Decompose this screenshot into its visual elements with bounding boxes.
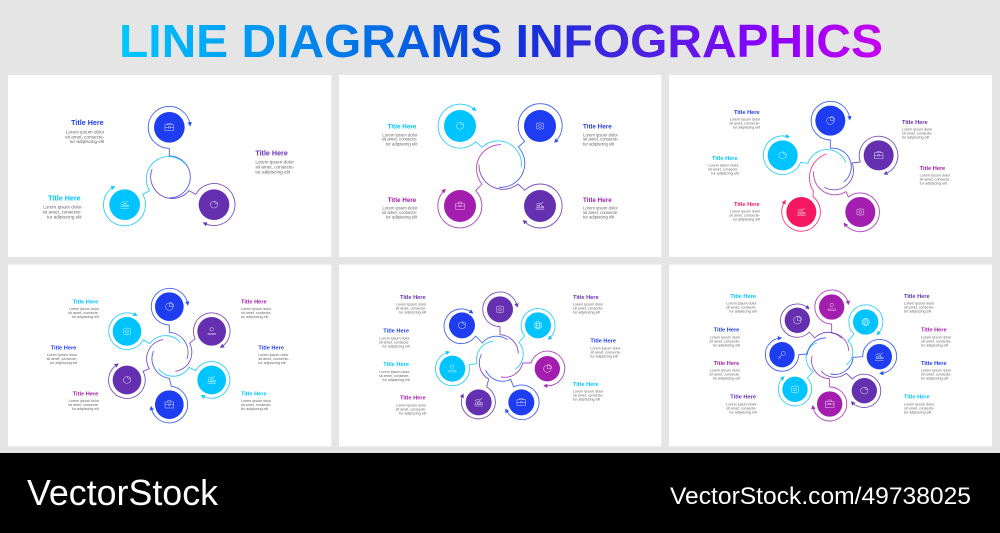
text: magenta lower left: Title Here — [400, 396, 426, 402]
panel 6: eight-step diagram — [669, 265, 992, 446]
text: purple lower left — [726, 395, 757, 414]
step: magenta right — [501, 351, 565, 386]
text: magenta lower left — [68, 391, 100, 411]
text: blue left: tur adipiscing elit — [382, 344, 410, 348]
text: blue: tur adipiscing elit — [70, 139, 105, 144]
text: cyan lower right: Lorem ipsum dolor — [904, 402, 935, 406]
text: cyan — [43, 194, 82, 219]
text: pink: Lorem ipsum dolor — [730, 210, 761, 214]
text: blue right: tur adipiscing elit — [590, 354, 618, 358]
step: magenta — [438, 145, 501, 228]
text: blue: Lorem ipsum dolor — [583, 132, 619, 137]
step: purple — [825, 136, 898, 190]
text: magenta left — [709, 361, 741, 381]
text: cyan upper left: Lorem ipsum dolor — [726, 302, 757, 306]
step: purple upper right — [176, 313, 230, 371]
text: blue: Lorem ipsum dolor — [66, 129, 105, 134]
text: pink: Title Here — [734, 202, 760, 208]
text: magenta: Lorem ipsum dolor — [382, 206, 418, 211]
step: cyan lower right — [159, 362, 230, 398]
text: magenta: tur adipiscing elit — [920, 182, 947, 186]
step: blue lower right — [486, 370, 539, 420]
text: magenta upper right: sit amet, consecte- — [241, 311, 272, 315]
panel 1: three-step diagram — [8, 75, 331, 257]
text: blue right: sit amet, consecte- — [258, 357, 290, 361]
text: blue left: Title Here — [383, 329, 409, 335]
text: cyan right — [573, 382, 604, 402]
text: magenta upper right: Title Here — [241, 300, 267, 306]
text: blue right: Lorem ipsum dolor — [258, 353, 289, 357]
text: magenta left: tur adipiscing elit — [713, 377, 740, 381]
text: purple upper right: Title Here — [573, 295, 599, 301]
step: cyan lower left — [778, 343, 816, 406]
text: blue: Title Here — [71, 119, 104, 127]
text: blue left: Lorem ipsum dolor — [710, 335, 741, 339]
step: pink — [782, 154, 826, 231]
text: blue right: tur adipiscing elit — [258, 361, 286, 365]
text: blue: Lorem ipsum dolor — [730, 118, 761, 122]
text: blue: Title Here — [734, 110, 760, 116]
text: magenta upper right — [241, 300, 272, 319]
text: cyan upper left: sit amet, consecte- — [726, 306, 757, 310]
text: pink — [729, 202, 761, 222]
step: purple lower right — [821, 371, 881, 407]
text: cyan lower right: sit amet, consecte- — [241, 403, 272, 407]
step: cyan — [438, 104, 521, 167]
step: magenta — [814, 172, 879, 232]
text: blue right: sit amet, consecte- — [921, 373, 952, 377]
text: pink: sit amet, consecte- — [729, 214, 761, 218]
panel 3: five-step diagram — [669, 75, 992, 257]
text: cyan upper left — [68, 300, 100, 319]
footer brand: VectorStock — [27, 472, 219, 513]
panel 4 background — [8, 265, 331, 446]
title: LINE DIAGRAMS INFOGRAPHICS — [119, 15, 883, 67]
text: blue left: sit amet, consecte- — [47, 357, 78, 361]
text: magenta: tur adipiscing elit — [386, 214, 418, 219]
text: magenta: Lorem ipsum dolor — [920, 174, 951, 178]
text: cyan: tur adipiscing elit — [47, 214, 82, 219]
step: cyan left — [435, 341, 493, 386]
text: magenta left: Lorem ipsum dolor — [710, 369, 741, 373]
text: cyan — [708, 156, 739, 176]
text: blue: tur adipiscing elit — [583, 141, 615, 146]
text: cyan: Title Here — [388, 124, 417, 131]
text: cyan lower right: Title Here — [241, 391, 267, 397]
text: cyan lower right: Lorem ipsum dolor — [241, 399, 272, 403]
text: cyan left: Lorem ipsum dolor — [379, 370, 410, 374]
text: blue left: sit amet, consecte- — [709, 339, 741, 343]
step: cyan — [103, 157, 185, 226]
text: magenta right: sit amet, consecte- — [921, 339, 952, 343]
text: purple upper right: tur adipiscing elit — [573, 311, 600, 315]
text: blue right: sit amet, consecte- — [590, 350, 622, 354]
text: magenta lower left: tur adipiscing elit — [399, 411, 426, 415]
text: purple lower left: sit amet, consecte- — [726, 406, 757, 410]
text: blue right: Title Here — [590, 339, 616, 345]
step: blue right — [831, 339, 897, 374]
text: blue left: tur adipiscing elit — [713, 343, 740, 347]
text: blue right — [590, 339, 622, 358]
text: cyan: Lorem ipsum dolor — [382, 132, 418, 137]
text: purple upper left: tur adipiscing elit — [399, 311, 426, 315]
text: magenta right — [921, 328, 952, 347]
text: cyan: tur adipiscing elit — [711, 172, 739, 176]
text: cyan upper left: tur adipiscing elit — [72, 315, 99, 319]
text: cyan upper left: Lorem ipsum dolor — [69, 307, 100, 311]
text: purple — [255, 149, 295, 175]
footer url: VectorStock.com/49738025 — [670, 483, 971, 510]
text: cyan left: sit amet, consecte- — [379, 374, 410, 378]
text: purple upper left — [396, 295, 427, 315]
text: blue: Title Here — [583, 124, 612, 131]
step: cyan — [763, 136, 846, 175]
text: blue: sit amet, consecte- — [583, 137, 619, 142]
text: purple: tur adipiscing elit — [902, 136, 929, 140]
text: magenta upper right: Lorem ipsum dolor — [241, 307, 272, 311]
text: purple lower left: Lorem ipsum dolor — [726, 402, 757, 406]
text: cyan — [382, 124, 418, 146]
text: magenta: Title Here — [388, 197, 417, 204]
panel 2: four-step diagram — [339, 75, 661, 257]
text: purple: sit amet, consecte- — [902, 132, 933, 136]
text: purple lower left: tur adipiscing elit — [729, 410, 757, 414]
text: magenta lower left: Lorem ipsum dolor — [396, 403, 427, 407]
text: cyan: tur adipiscing elit — [386, 141, 418, 146]
text: magenta right: Title Here — [921, 328, 947, 334]
text: blue left: Title Here — [714, 328, 739, 334]
step: blue upper left — [444, 309, 507, 344]
text: blue right: Lorem ipsum dolor — [921, 369, 952, 373]
step: blue left — [765, 338, 826, 371]
text: purple upper right: sit amet, consecte- — [904, 306, 935, 310]
text: blue right — [921, 361, 952, 381]
text: magenta lower left: Lorem ipsum dolor — [69, 399, 100, 403]
text: cyan right: sit amet, consecte- — [573, 394, 604, 398]
step: blue bottom — [151, 351, 188, 423]
text: cyan upper left: Title Here — [730, 294, 756, 300]
text: blue: tur adipiscing elit — [733, 126, 760, 130]
text: magenta right: tur adipiscing elit — [921, 343, 948, 347]
text: purple: Lorem ipsum dolor — [255, 160, 294, 165]
step: purple lower left — [109, 340, 163, 398]
text: cyan lower right: tur adipiscing elit — [904, 410, 931, 414]
text: blue left: tur adipiscing elit — [50, 361, 77, 365]
text: magenta left: sit amet, consecte- — [709, 373, 741, 377]
text: cyan left: Title Here — [383, 362, 409, 368]
text: magenta — [920, 166, 951, 186]
text: magenta: sit amet, consecte- — [382, 210, 418, 215]
panel 3 background — [669, 75, 992, 257]
text: blue — [65, 119, 105, 144]
text: blue right: Title Here — [921, 361, 947, 367]
text: blue: sit amet, consecte- — [65, 134, 105, 139]
text: purple upper left: Title Here — [400, 295, 426, 301]
step: blue — [148, 106, 190, 198]
text: blue left — [709, 328, 741, 347]
step: blue — [811, 101, 851, 182]
panel 4: six-step diagram — [8, 265, 331, 446]
step: blue — [499, 104, 562, 187]
text: cyan right: Title Here — [573, 382, 599, 388]
text: purple upper right: Lorem ipsum dolor — [904, 302, 935, 306]
step: magenta bottom — [812, 356, 847, 421]
text: purple: Title Here — [255, 149, 288, 157]
step: cyan upper left — [109, 313, 180, 350]
panel 1 background — [8, 75, 331, 257]
text: blue right — [258, 346, 290, 365]
text: magenta lower left — [396, 396, 427, 415]
text: cyan lower right: Title Here — [904, 395, 930, 401]
text: purple upper right: Title Here — [904, 294, 930, 300]
text: purple upper left: Lorem ipsum dolor — [396, 303, 427, 307]
text: blue left: Title Here — [51, 346, 76, 352]
text: cyan upper left — [726, 294, 757, 314]
text: magenta lower left: tur adipiscing elit — [72, 407, 99, 411]
text: cyan upper left: tur adipiscing elit — [729, 310, 757, 314]
text: cyan: sit amet, consecte- — [382, 137, 418, 142]
text: cyan: Lorem ipsum dolor — [43, 205, 82, 210]
text: blue left: Lorem ipsum dolor — [379, 336, 410, 340]
text: magenta right — [583, 197, 619, 219]
text: cyan: Title Here — [48, 194, 81, 202]
panel 5 background — [339, 265, 661, 446]
text: magenta right: tur adipiscing elit — [583, 214, 615, 219]
text: blue right: tur adipiscing elit — [921, 377, 948, 381]
text: cyan lower right: sit amet, consecte- — [904, 406, 935, 410]
text: magenta left: Title Here — [714, 361, 739, 367]
text: cyan upper left: Title Here — [73, 300, 98, 306]
text: blue left: sit amet, consecte- — [379, 340, 410, 344]
text: purple upper right: sit amet, consecte- — [573, 307, 604, 311]
step: magenta top — [815, 290, 849, 351]
text: pink: tur adipiscing elit — [733, 218, 760, 222]
text: blue — [729, 110, 761, 130]
text: cyan: Lorem ipsum dolor — [708, 164, 739, 168]
text: magenta right: Lorem ipsum dolor — [921, 335, 952, 339]
text: cyan: sit amet, consecte- — [43, 210, 82, 215]
text: blue left: Lorem ipsum dolor — [47, 353, 78, 357]
step: cyan upper right — [847, 305, 883, 365]
step: purple — [479, 165, 562, 228]
text: blue: sit amet, consecte- — [729, 122, 761, 126]
text: magenta lower left: sit amet, consecte- — [396, 407, 427, 411]
text: purple upper right — [904, 294, 935, 314]
footer bar — [0, 453, 1000, 533]
text: purple upper left: sit amet, consecte- — [396, 307, 427, 311]
step: blue top — [151, 288, 188, 359]
text: purple: Title Here — [902, 120, 928, 126]
text: cyan lower right: tur adipiscing elit — [241, 407, 268, 411]
panel 2 background — [339, 75, 661, 257]
text: purple: Lorem ipsum dolor — [902, 128, 933, 132]
text: blue right: Title Here — [258, 346, 284, 352]
text: cyan right: Lorem ipsum dolor — [573, 390, 604, 394]
text: cyan: Title Here — [712, 156, 738, 162]
text: magenta: Title Here — [920, 166, 945, 172]
text: magenta right: sit amet, consecte- — [583, 210, 619, 215]
text: blue — [583, 124, 619, 146]
text: purple: tur adipiscing elit — [255, 170, 291, 175]
text: purple upper right: Lorem ipsum dolor — [573, 303, 604, 307]
text: cyan left — [379, 362, 410, 382]
step: purple lower left — [461, 355, 495, 419]
text: cyan left: tur adipiscing elit — [382, 378, 410, 382]
text: magenta right: Lorem ipsum dolor — [583, 206, 619, 211]
text: blue right: Lorem ipsum dolor — [590, 346, 621, 350]
panel 6 background — [669, 265, 992, 446]
text: blue left — [47, 346, 78, 365]
text: cyan upper left: sit amet, consecte- — [68, 311, 100, 315]
text: purple upper right — [573, 295, 604, 315]
text: magenta lower left: Title Here — [73, 391, 98, 397]
panel 5: seven-step diagram — [339, 265, 661, 446]
text: magenta lower left: sit amet, consecte- — [68, 403, 100, 407]
text: magenta right: Title Here — [583, 197, 612, 204]
text: purple — [902, 120, 933, 140]
text: cyan right: tur adipiscing elit — [573, 398, 600, 402]
text: purple: sit amet, consecte- — [255, 165, 295, 170]
text: magenta upper right: tur adipiscing elit — [241, 315, 268, 319]
text: magenta: sit amet, consecte- — [920, 178, 951, 182]
text: blue left — [379, 329, 410, 348]
step: purple upper left — [780, 304, 841, 338]
text: cyan: sit amet, consecte- — [708, 168, 739, 172]
text: purple upper right: tur adipiscing elit — [904, 310, 931, 314]
text: cyan lower right — [904, 395, 935, 414]
step: cyan upper right — [516, 309, 555, 369]
step: purple — [151, 169, 235, 226]
step: purple top — [483, 292, 518, 353]
text: purple lower left: Title Here — [730, 395, 756, 401]
text: magenta — [382, 197, 418, 219]
text: cyan lower right — [241, 391, 272, 411]
